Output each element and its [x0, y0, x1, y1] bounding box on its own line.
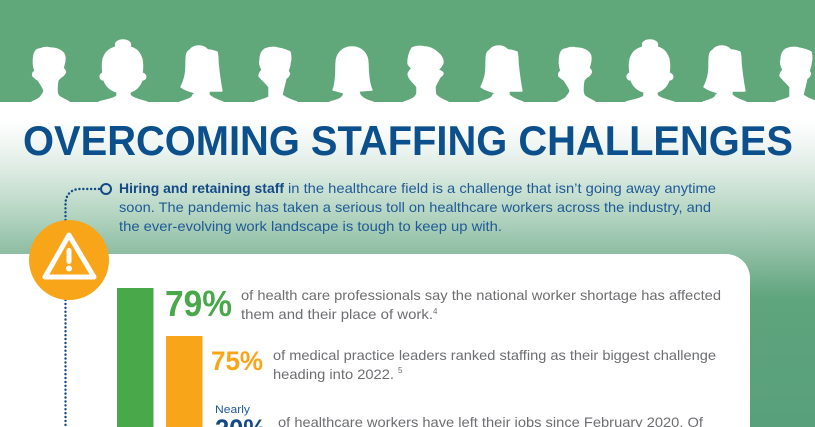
silhouette 8 [558, 47, 595, 102]
silhouette 6 [404, 46, 448, 102]
green header band [0, 0, 815, 102]
silhouette 9 [626, 40, 674, 102]
stat: 79%: 4 [433, 307, 438, 316]
silhouette 1 [32, 47, 69, 102]
stat: nearly 20% [215, 404, 703, 427]
stat: 75%: of medical practice leaders ranked staffing as their biggest challenge [273, 347, 716, 363]
silhouette 10 [703, 46, 746, 102]
stat: 79%: 79% [165, 283, 232, 324]
stat: 79%: of health care professionals say the national worker shortage has affected [241, 287, 721, 303]
silhouette 11 [776, 47, 815, 102]
silhouette 4 [255, 47, 297, 102]
silhouette 3 [180, 46, 223, 102]
intro text: in the healthcare field is a challenge that isn’t going away anytime [288, 180, 716, 196]
icon: warning badge [29, 220, 109, 300]
intro text: Hiring and retaining staff [119, 180, 284, 196]
intro text: the ever-evolving work landscape is tough to keep up with. [119, 218, 502, 234]
stat: 79% [165, 283, 721, 324]
stat: 75%: heading into 2022. [273, 366, 394, 382]
orange bar [166, 336, 202, 427]
intro text: soon. The pandemic has taken a serious toll on healthcare workers across the industry, and [119, 199, 711, 215]
silhouette 5 [330, 47, 373, 102]
stat: 79%: them and their place of work. [241, 306, 433, 322]
silhouette 2 [99, 40, 147, 102]
stat: 75% [211, 346, 716, 382]
intro text [119, 180, 716, 234]
connector ring [101, 184, 111, 194]
white content card [0, 254, 750, 427]
green bar [117, 288, 154, 427]
stat: 75%: 75% [211, 346, 263, 376]
stat: 75%: 5 [398, 366, 403, 375]
title: OVERCOMING STAFFING CHALLENGES [23, 117, 793, 164]
dotted connector [66, 189, 99, 427]
silhouette row [32, 40, 815, 102]
silhouette 7 [480, 46, 523, 102]
stat: nearly 20%: Nearly [215, 404, 251, 416]
